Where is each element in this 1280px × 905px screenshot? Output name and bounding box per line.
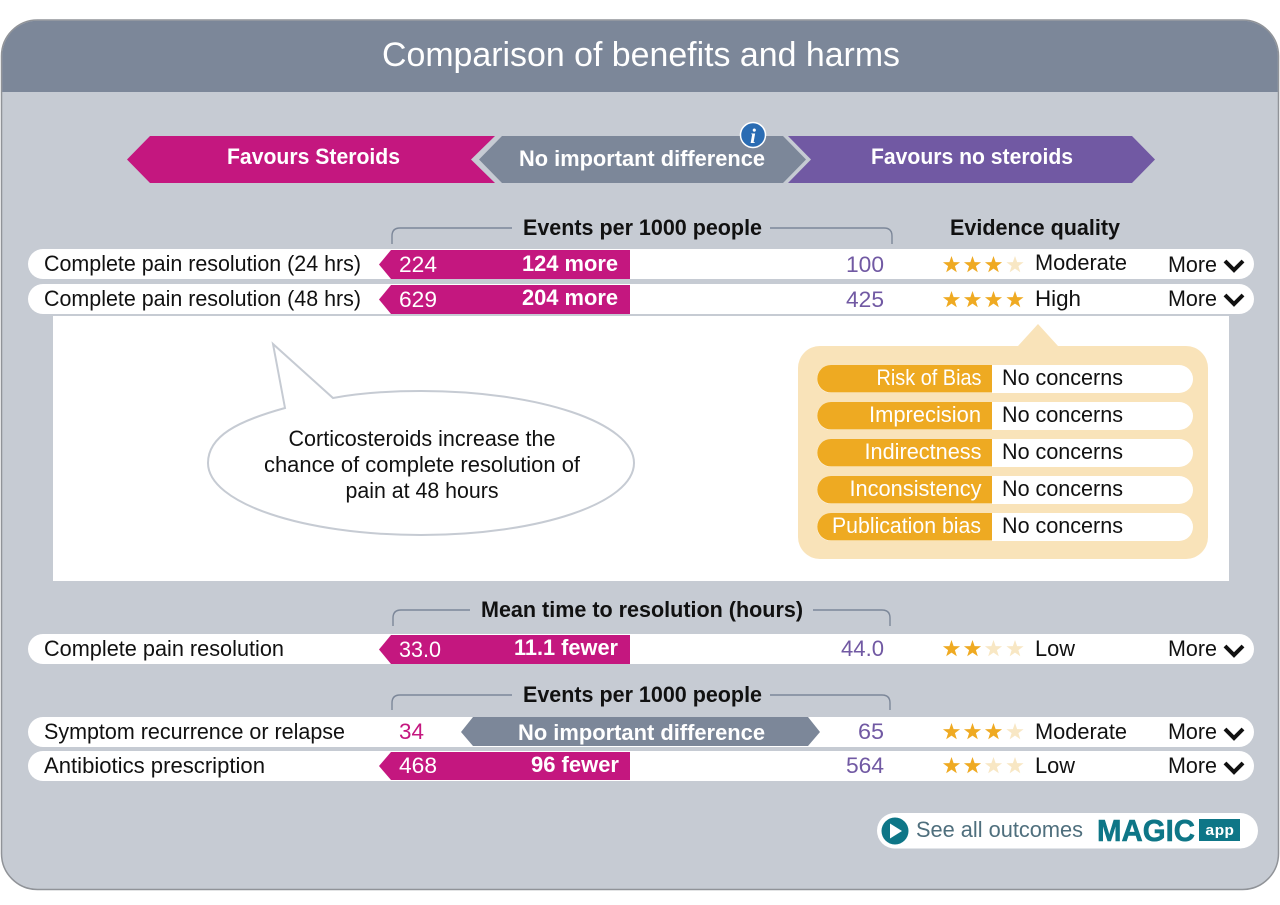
domain: indirectness: No concerns — [1002, 439, 1123, 464]
icon: play — [882, 818, 908, 844]
row: complete pain resolution: Complete pain resolution — [44, 636, 284, 661]
domain: imprecision: Imprecision — [869, 402, 981, 427]
row: complete pain resolution 24 hrs: Moderate — [1035, 250, 1127, 275]
row: symptom recurrence or relapse: No important difference — [518, 720, 765, 745]
heading: events per 1000 people, lower: Events per 1000 people — [523, 682, 762, 707]
button: see all outcomes, MAGIC app: See all outcomes — [916, 817, 1083, 842]
domain: risk of bias — [817, 365, 1193, 393]
callout: speech bubble: pain at 48 hours — [346, 478, 498, 503]
arrow: no important difference — [479, 136, 806, 183]
domain: imprecision — [817, 402, 1193, 430]
icon: info: i — [750, 124, 756, 148]
arrow: no important difference: No important difference — [519, 146, 765, 171]
row: antibiotics prescription — [28, 751, 1254, 781]
row: complete pain resolution: 44.0 — [841, 636, 884, 661]
logo: MAGIC app: app — [1205, 823, 1234, 840]
arrow: favours no steroids — [788, 136, 1155, 183]
heading: events per 1000 people: Events per 1000 people — [523, 215, 762, 240]
heading: events per 1000 people — [392, 215, 892, 244]
row: symptom recurrence or relapse: More — [1168, 719, 1217, 744]
row: complete pain resolution 24 hrs: More — [1168, 252, 1217, 277]
domain: publication bias — [817, 513, 1193, 541]
domain: inconsistency — [817, 476, 1193, 504]
row: complete pain resolution 48 hrs: High — [1035, 286, 1081, 311]
domain: risk of bias: No concerns — [1002, 365, 1123, 390]
domain: inconsistency: No concerns — [1002, 476, 1123, 501]
row: complete pain resolution: More — [1168, 636, 1217, 661]
button: see all outcomes, MAGIC app — [877, 813, 1258, 848]
arrow: favours steroids — [127, 136, 495, 183]
domain: indirectness — [817, 439, 1193, 467]
callout: speech bubble: Corticosteroids increase the — [288, 426, 556, 451]
row: complete pain resolution 48 hrs: Complete pain resolution (48 hrs) — [44, 286, 361, 311]
heading: mean time to resolution: Mean time to resolution (hours) — [481, 597, 803, 622]
heading: evidence quality: Evidence quality — [950, 215, 1121, 240]
domain: publication bias: No concerns — [1002, 513, 1123, 538]
row: symptom recurrence or relapse: 34 — [399, 719, 424, 744]
row: antibiotics prescription: 96 fewer — [531, 752, 619, 777]
domain: indirectness: Indirectness — [864, 439, 982, 464]
row: complete pain resolution 24 hrs: Complete pain resolution (24 hrs) — [44, 251, 361, 276]
row: complete pain resolution 48 hrs — [28, 284, 1254, 314]
row: complete pain resolution: 33.0 — [399, 637, 441, 662]
title: Comparison of benefits and harms — [382, 36, 900, 74]
heading: mean time to resolution — [393, 597, 890, 626]
row: symptom recurrence or relapse: Symptom recurrence or relapse — [44, 719, 345, 744]
panel: expanded detail — [53, 316, 1229, 581]
row: complete pain resolution 48 hrs: 629 — [399, 287, 437, 312]
row: complete pain resolution 24 hrs: 100 — [846, 252, 884, 277]
row: complete pain resolution: Low — [1035, 636, 1075, 661]
arrow: favours steroids: Favours Steroids — [227, 144, 400, 169]
row: antibiotics prescription: 468 — [399, 753, 437, 778]
row: complete pain resolution 24 hrs — [28, 249, 1254, 279]
domain: risk of bias: Risk of Bias — [876, 365, 982, 390]
heading: events per 1000 people, lower — [392, 682, 890, 710]
icon: info — [740, 122, 766, 148]
row: symptom recurrence or relapse — [28, 717, 1254, 747]
row: symptom recurrence or relapse: 65 — [858, 719, 884, 744]
row: antibiotics prescription: Antibiotics prescription — [44, 753, 265, 778]
row: complete pain resolution 48 hrs: 425 — [846, 287, 884, 312]
legend: direction arrows — [127, 122, 1155, 183]
row: antibiotics prescription: More — [1168, 753, 1217, 778]
row: complete pain resolution: 11.1 fewer — [514, 635, 618, 660]
panel: evidence quality domains — [798, 324, 1208, 559]
row: antibiotics prescription: Low — [1035, 753, 1075, 778]
row: antibiotics prescription: 564 — [846, 753, 884, 778]
panel: title header — [2, 21, 1278, 92]
row: complete pain resolution 24 hrs: 124 more — [522, 251, 618, 276]
row: symptom recurrence or relapse: Moderate — [1035, 719, 1127, 744]
domain: inconsistency: Inconsistency — [850, 476, 982, 501]
callout: speech bubble: chance of complete resolution of — [264, 452, 581, 477]
row: complete pain resolution 48 hrs: More — [1168, 286, 1217, 311]
row: complete pain resolution 24 hrs: 224 — [399, 252, 437, 277]
domain: imprecision: No concerns — [1002, 402, 1123, 427]
logo: MAGIC app: MAGIC — [1097, 813, 1195, 848]
row: complete pain resolution 48 hrs: 204 more — [522, 285, 618, 310]
domain: publication bias: Publication bias — [832, 513, 981, 538]
callout: speech bubble — [208, 344, 634, 535]
row: complete pain resolution — [28, 634, 1254, 664]
arrow: favours no steroids: Favours no steroids — [871, 144, 1073, 169]
